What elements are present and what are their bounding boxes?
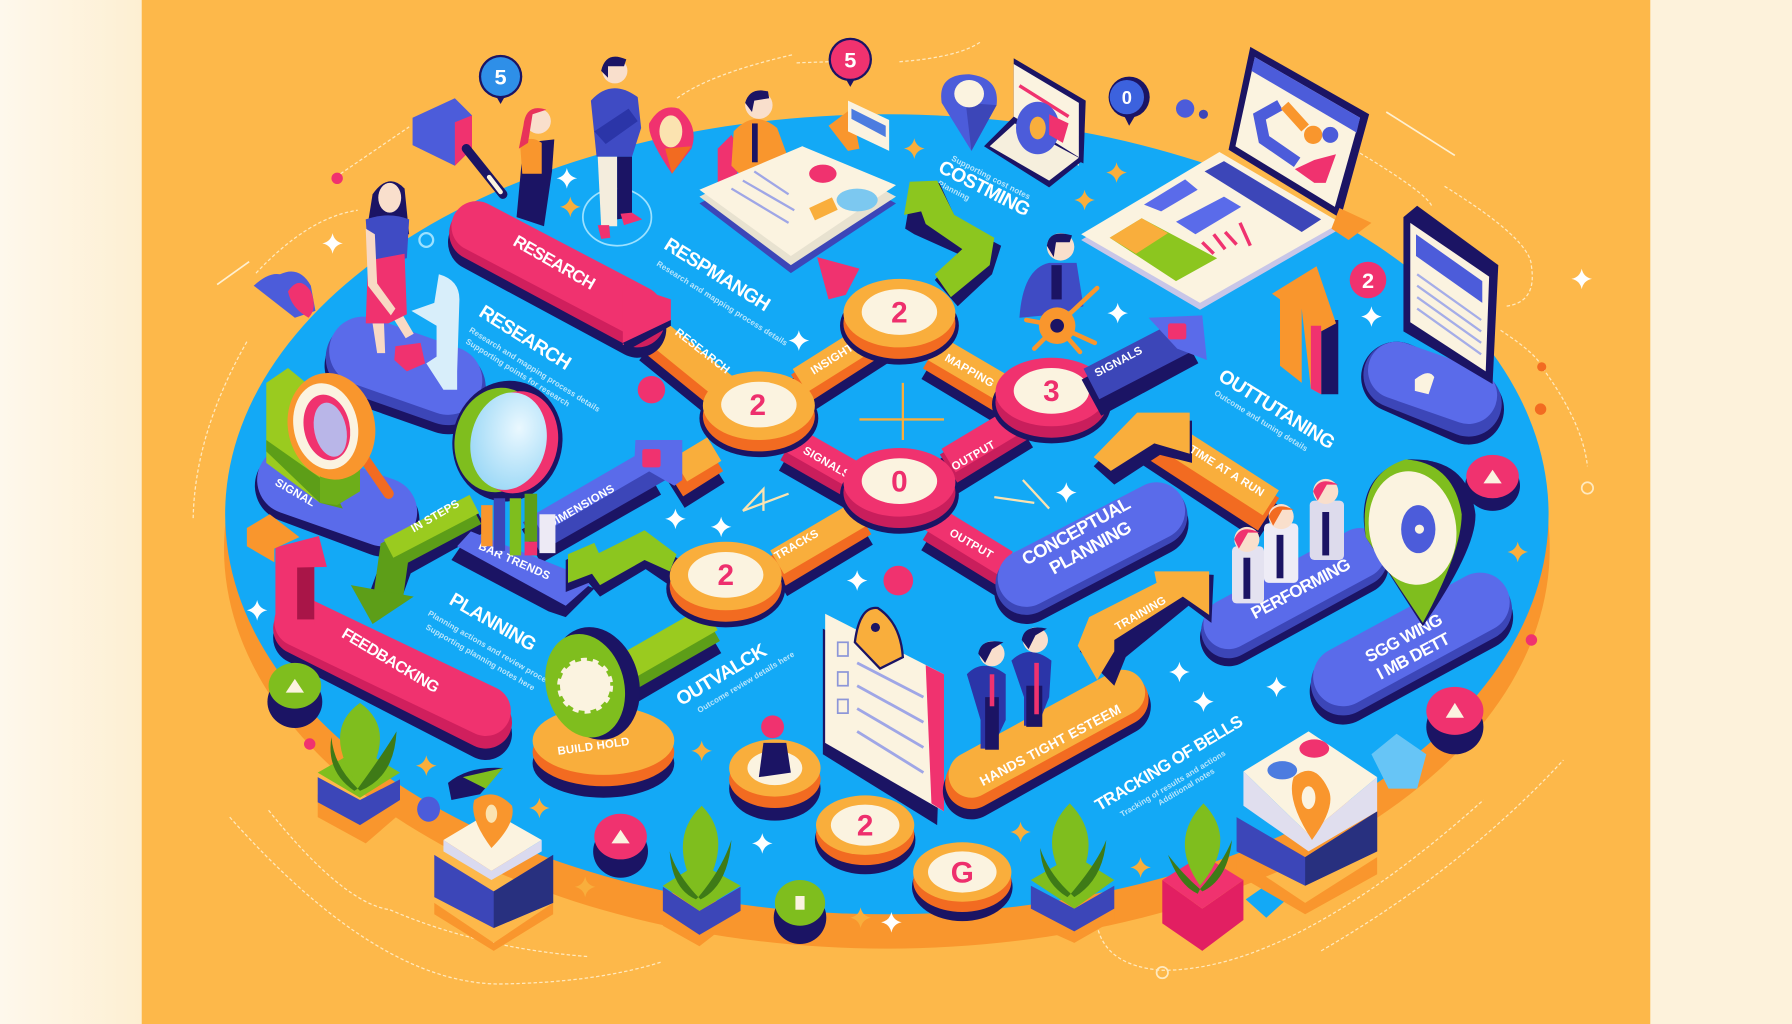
numbered disc 2 [840,279,959,365]
connector labels [672,327,998,563]
heading: outtutaning: OUTTUTANING [1214,365,1338,454]
heading: outvalck: Outcome review details here [696,649,796,715]
numbered disc 1: 2 [749,389,766,422]
green arrow down-left: IN STEPS [409,498,462,535]
numbered disc 5: 2 [857,809,873,842]
indigo data pill with bars [451,494,594,617]
icon: location pin red [649,107,694,174]
connector labels: SIGNALS [801,445,852,481]
pin on box [417,768,553,951]
plant in pink pot [1162,803,1243,951]
red pill: research: RESEARCH [510,231,599,294]
large magnifier [441,370,574,512]
orange arrow upward right: TRAINING [1113,595,1169,633]
orange disc with person [729,715,821,821]
plant left [318,703,400,843]
icon: magnifier handle [466,149,503,194]
pink arrow tip [817,257,859,299]
figure: woman in black [517,108,554,226]
indigo base with woman [363,274,459,395]
laptop [1081,47,1371,310]
green arrow down-left [351,498,480,624]
figure: man with gear [1019,233,1097,352]
right margin [1650,0,1792,1024]
indigo pill: savings: I MB DETT [1373,628,1454,684]
button green bottom [774,880,826,944]
orange pill with people: HANDS TIGHT ESTEEM [977,702,1124,789]
figure: standing man [583,57,651,246]
numbered disc 1 [699,371,818,457]
balloon number 5 pink: 5 [844,47,856,72]
orbs [304,173,1593,978]
left margin [0,0,142,1024]
connector labels: RESEARCH [672,327,732,377]
green arrow to disc [566,530,680,597]
heading: outtutaning: Outcome and tuning details [1213,388,1310,454]
connector labels: OUTPUT [947,527,995,562]
balloon number 5 pink [829,38,872,87]
sparkle stars gold [416,138,1528,928]
numbered disc 3: 3 [1043,375,1060,408]
pink return arrow [247,514,486,734]
tablet on indigo base [1397,206,1498,409]
orange arrow with bar: TIME AT A RUN [1187,444,1266,499]
figure: seated man [718,90,793,192]
heading: costming: COSTMING [935,156,1033,221]
balloon number 5 blue [479,55,522,104]
heading: tracking of bells: Tracking of results and actions [1119,748,1228,819]
heading: planning: PLANNING [446,589,540,656]
indigo arrow right of disc 3 [1091,315,1207,398]
numbered disc 3 [992,358,1111,443]
connector labels: INSIGHT [809,342,856,377]
orange up arrow [1272,266,1338,394]
indigo arrow [531,440,682,546]
crystal [1371,734,1426,789]
red pill: research [477,226,671,350]
orange disc with green coin [533,617,674,798]
icon: flag [829,101,889,151]
heading: costming: Supporting cost notes [950,154,1032,202]
heading: respmanch: RESPMANGH [660,234,774,316]
green block with magnifier [266,365,389,520]
orange arrow with bar [1094,413,1271,523]
green zigzag arrow [904,181,1001,306]
icon: cloud [254,271,315,318]
plant bottom right [1031,803,1114,943]
balloon number 0: 0 [1122,87,1132,108]
indigo pill: savings: SGG WING [1362,609,1445,666]
pin and document [941,58,1086,187]
pink return arrow: FEEDBACKING [339,625,442,697]
compass marks [743,383,1049,511]
button pink bottom [593,814,648,878]
heading: outvalck: OUTVALCK [672,639,771,711]
lettered disc G [912,842,1013,921]
indigo pill: conceptual planning [1018,492,1157,592]
indigo pill: conceptual planning: PLANNING [1045,516,1135,578]
heading: costming: Planning [936,179,971,203]
heading: research: Research and mapping process details [468,325,602,414]
platform rim [224,149,1550,949]
dashed decorative paths [193,41,1587,984]
orange arrow upward right [1078,571,1214,686]
clipboard [823,608,944,825]
connector labels: OUTPUT [950,439,998,473]
figures: two men [967,627,1051,750]
balloon number 5 blue: 5 [495,65,507,90]
indigo pill: savings [1343,602,1480,691]
button green left [267,663,322,728]
heading: planning: Planning actions and review process [426,609,556,689]
balloon number 0 [1109,77,1150,126]
open book [699,146,896,273]
heading: planning: Supporting planning notes here [424,623,537,693]
heading: respmanch: Research and mapping process details [655,259,790,348]
blue platform [225,114,1549,914]
central disc [840,448,959,534]
orange disc with green coin: BUILD HOLD [557,736,630,758]
green location pin [1360,459,1475,626]
badge number 2: 2 [1362,268,1374,293]
connector labels: MAPPING [943,352,996,390]
numbered disc 4 [666,542,785,627]
heading: tracking of bells: TRACKING OF BELLS [1091,711,1246,815]
green bar to coin [617,618,711,690]
central disc: 0 [891,465,908,498]
connector labels: TRACKS [773,528,821,563]
indigo pill with people [1229,479,1360,638]
indigo pill with people: PERFORMING [1247,554,1353,623]
stacked papers on indigo box with pin [1237,731,1377,914]
figures: group of people [1232,479,1344,603]
plant bottom [663,806,741,946]
indigo arrow right of disc 3: SIGNALS [1093,345,1145,380]
icon: cube [413,98,472,166]
green block with magnifier: SIGNAL [273,477,317,509]
indigo pill: conceptual planning: CONCEPTUAL [1018,492,1134,569]
heading: research: RESEARCH [475,301,574,374]
lettered disc G: G [951,856,974,889]
indigo data pill with bars: BAR TRENDS [476,540,552,583]
connector bars [651,330,1023,579]
numbered disc 2: 2 [891,296,908,329]
indigo arrow: DIMENSIONS [546,483,617,531]
button pink right [1426,687,1483,754]
badge number 2 [1350,262,1386,298]
heading: research: Supporting points for research [464,337,571,409]
numbered disc 4: 2 [717,559,734,592]
figure: woman in red skirt [366,181,425,371]
sparkle stars white [247,168,1592,933]
button pink upper right [1465,455,1520,511]
numbered disc 5 [815,795,915,874]
heading: tracking of bells: Additional notes [1156,766,1217,807]
bar chart [481,494,555,555]
icon: wrench sculpture [411,274,459,390]
